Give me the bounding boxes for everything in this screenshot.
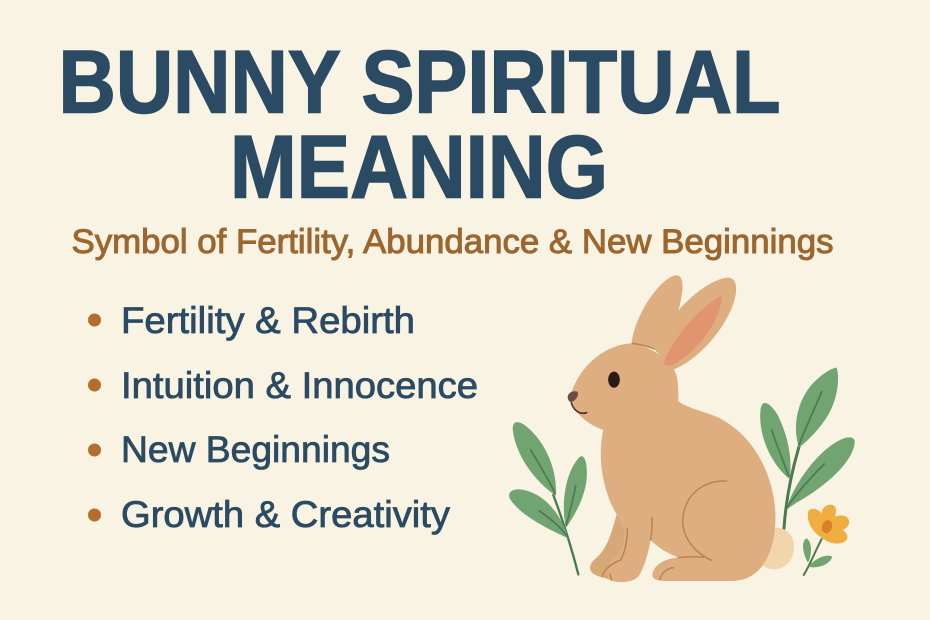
icon: nose bbox=[568, 391, 578, 402]
icon: flower bbox=[803, 505, 849, 575]
bullet list bbox=[88, 300, 478, 535]
bullet: new beginnings: New Beginnings bbox=[121, 429, 390, 470]
icon: left plant bbox=[509, 422, 587, 574]
title: BUNNY SPIRITUAL bbox=[58, 32, 780, 132]
bullet: growth and creativity: Growth & Creativity bbox=[121, 494, 451, 535]
icon: inner ear bbox=[664, 296, 722, 366]
icon: mouth bbox=[571, 403, 587, 413]
icon: front ear bbox=[654, 278, 736, 369]
title: MEANING bbox=[230, 116, 608, 216]
icon: ear and body outlines bbox=[602, 343, 727, 580]
subtitle: Symbol of Fertility, Abundance & New Beginnings bbox=[72, 223, 834, 261]
illustration: rabbit with plants bbox=[509, 275, 855, 582]
bullet: intuition and innocence: Intuition & Innocence bbox=[121, 365, 478, 406]
title bbox=[58, 32, 780, 216]
icon: far front leg bbox=[590, 514, 632, 582]
icon: rabbit body bbox=[571, 343, 775, 582]
icon: right plant bbox=[760, 368, 855, 528]
icon: eye bbox=[608, 372, 620, 388]
icon: back ear bbox=[632, 275, 683, 349]
bullet: fertility and rebirth: Fertility & Rebirth bbox=[121, 300, 415, 341]
icon: tail bbox=[762, 528, 794, 569]
